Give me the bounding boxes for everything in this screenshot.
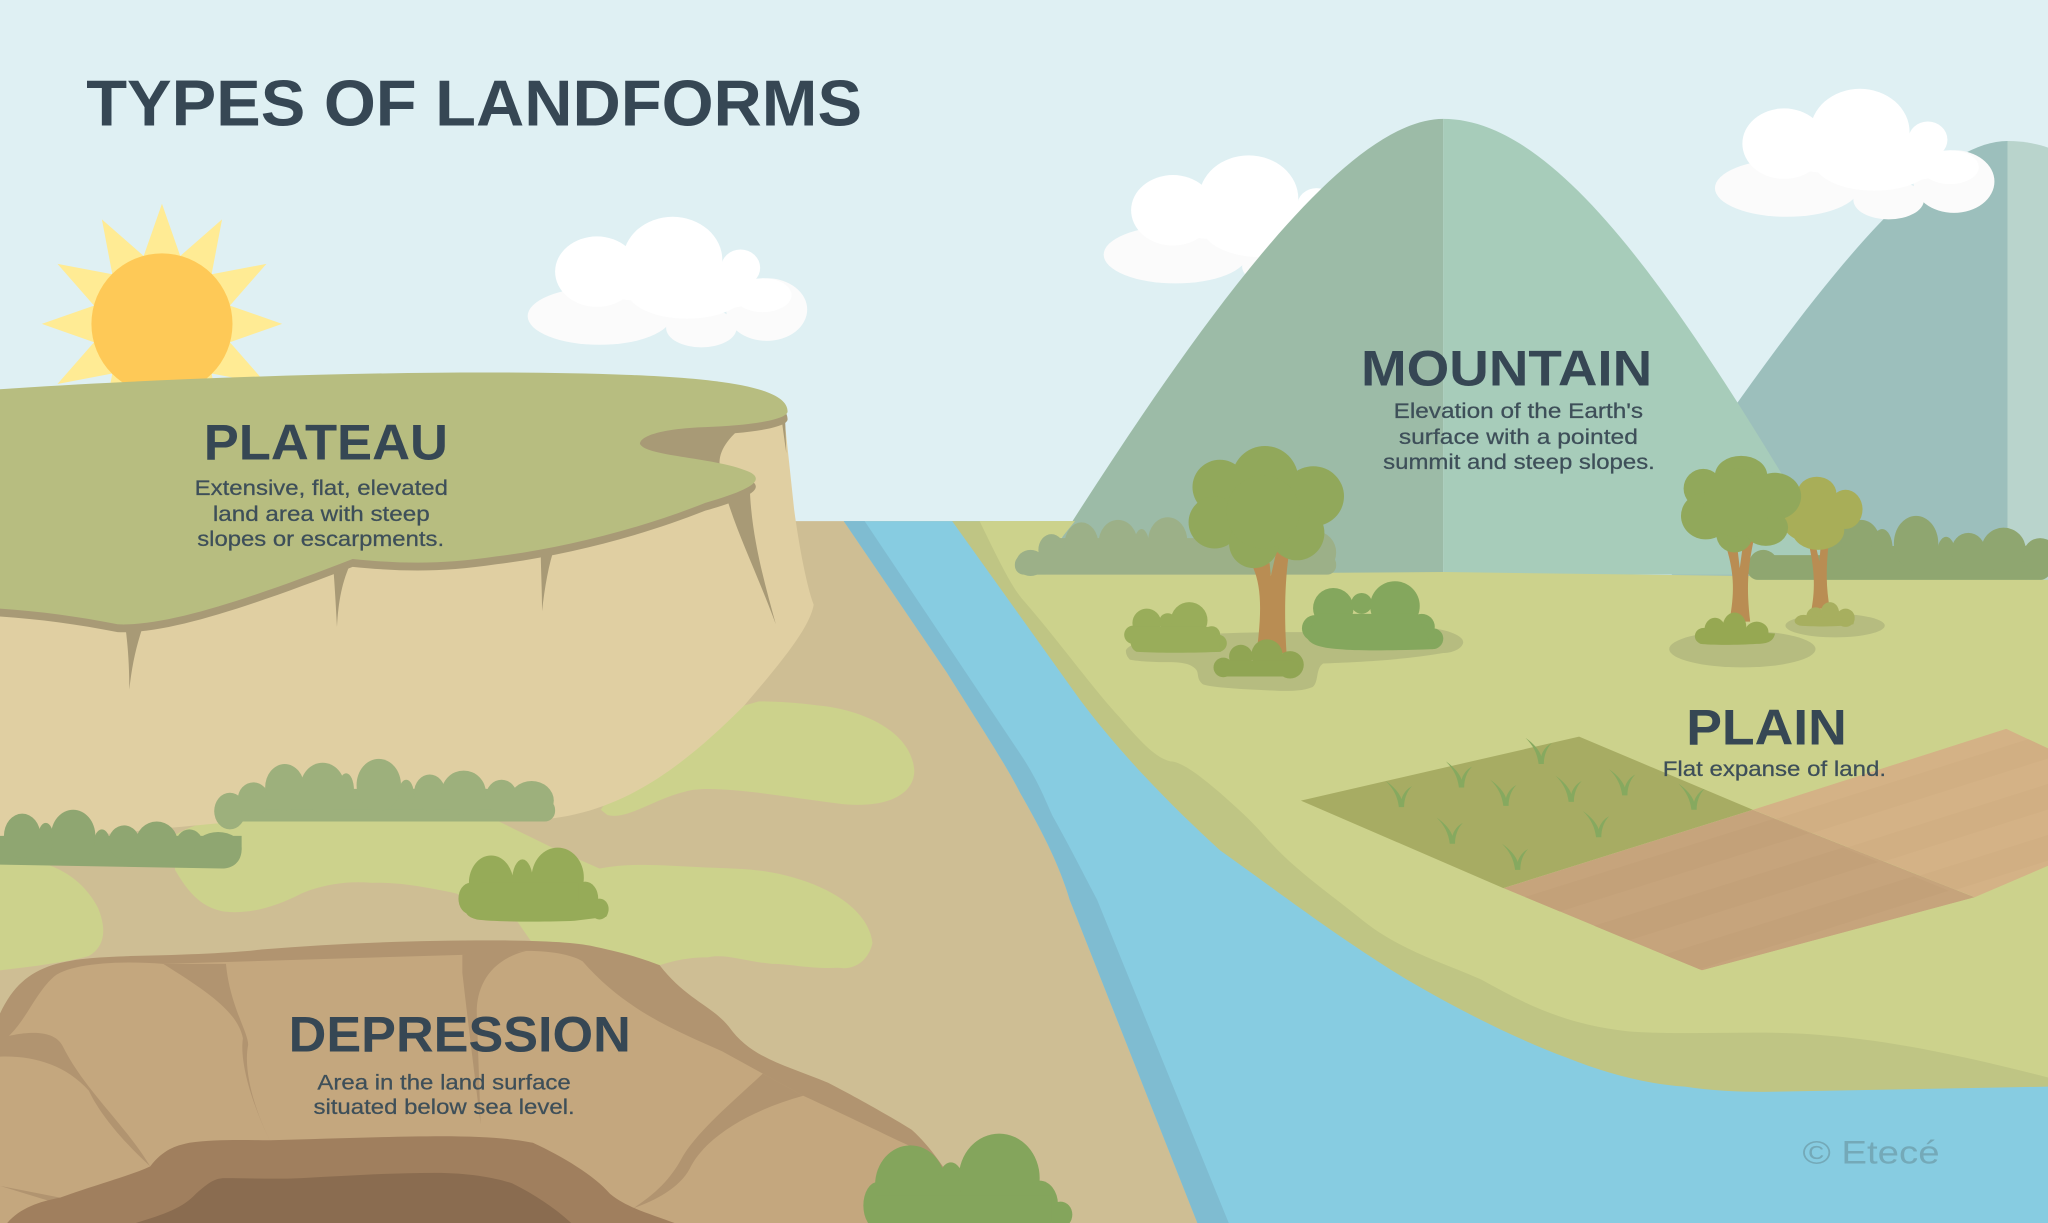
bush on cliff — [214, 759, 555, 829]
plateau cliff — [0, 392, 814, 842]
front tree right — [1681, 456, 1801, 622]
icon: sun — [42, 204, 282, 444]
background bush right of plain — [1748, 516, 2048, 580]
copyright: © Etecé — [1802, 1134, 1940, 1171]
label: plain — [1663, 699, 1886, 781]
back mountain — [1672, 141, 2048, 581]
title: TYPES OF LANDFORMS — [86, 66, 862, 139]
tree shadow right — [1669, 614, 1885, 667]
green patches on ground — [0, 701, 914, 970]
label: mountain: summit and steep slopes. — [1383, 449, 1655, 474]
label: plain: PLAIN — [1686, 699, 1847, 755]
label: plateau — [195, 415, 448, 551]
big tree — [1189, 446, 1344, 653]
depression pit — [7, 1136, 677, 1223]
label: mountain — [1361, 340, 1655, 474]
crop field — [1301, 737, 1753, 888]
label: depression — [289, 1006, 631, 1119]
depression inner ground — [0, 951, 943, 1223]
plateau rim — [0, 380, 788, 632]
main mountain — [1038, 119, 1842, 575]
cloud over mountains — [1715, 89, 1994, 219]
plateau top — [0, 372, 788, 624]
label: depression: DEPRESSION — [289, 1006, 631, 1062]
depression pit dark centre — [133, 1173, 572, 1223]
back tree right — [1780, 477, 1863, 609]
depression cracks — [0, 951, 803, 1208]
bush at depression edge — [863, 1134, 1072, 1223]
tree shadow left — [1126, 628, 1463, 691]
bush under big tree — [1214, 639, 1304, 679]
background bush left of plain — [1015, 517, 1336, 576]
label: mountain: surface with a pointed — [1399, 424, 1638, 449]
tan ground — [0, 521, 1306, 1223]
bush left of big tree — [1124, 602, 1227, 653]
bush under back tree — [1795, 602, 1855, 627]
ploughed field near — [1503, 810, 1975, 970]
label: mountain: Elevation of the Earth's — [1394, 398, 1643, 423]
bush right of big tree — [1302, 581, 1443, 650]
plain river bank — [952, 521, 2048, 1092]
label: plateau: land area with steep — [213, 501, 430, 526]
bush under front tree — [1695, 613, 1775, 645]
bush at left — [0, 810, 242, 869]
cloud behind mountain — [1104, 155, 1383, 286]
label: plateau: Extensive, flat, elevated — [195, 475, 448, 500]
label: plateau: PLATEAU — [204, 415, 448, 471]
cloud above plateau — [528, 217, 807, 347]
ploughed field far — [1753, 729, 2048, 897]
plateau cracks and notch shadow — [125, 415, 786, 690]
label: mountain: MOUNTAIN — [1361, 340, 1652, 396]
label: depression: situated below sea level. — [313, 1094, 575, 1119]
label: plateau: slopes or escarpments. — [197, 526, 444, 551]
grass tufts — [1386, 738, 1704, 870]
depression rim — [0, 940, 973, 1223]
label: depression: Area in the land surface — [317, 1069, 571, 1094]
label: plain: Flat expanse of land. — [1663, 756, 1886, 781]
bush on meadow — [458, 848, 609, 922]
river — [844, 521, 2048, 1223]
plain land — [980, 521, 2048, 1078]
